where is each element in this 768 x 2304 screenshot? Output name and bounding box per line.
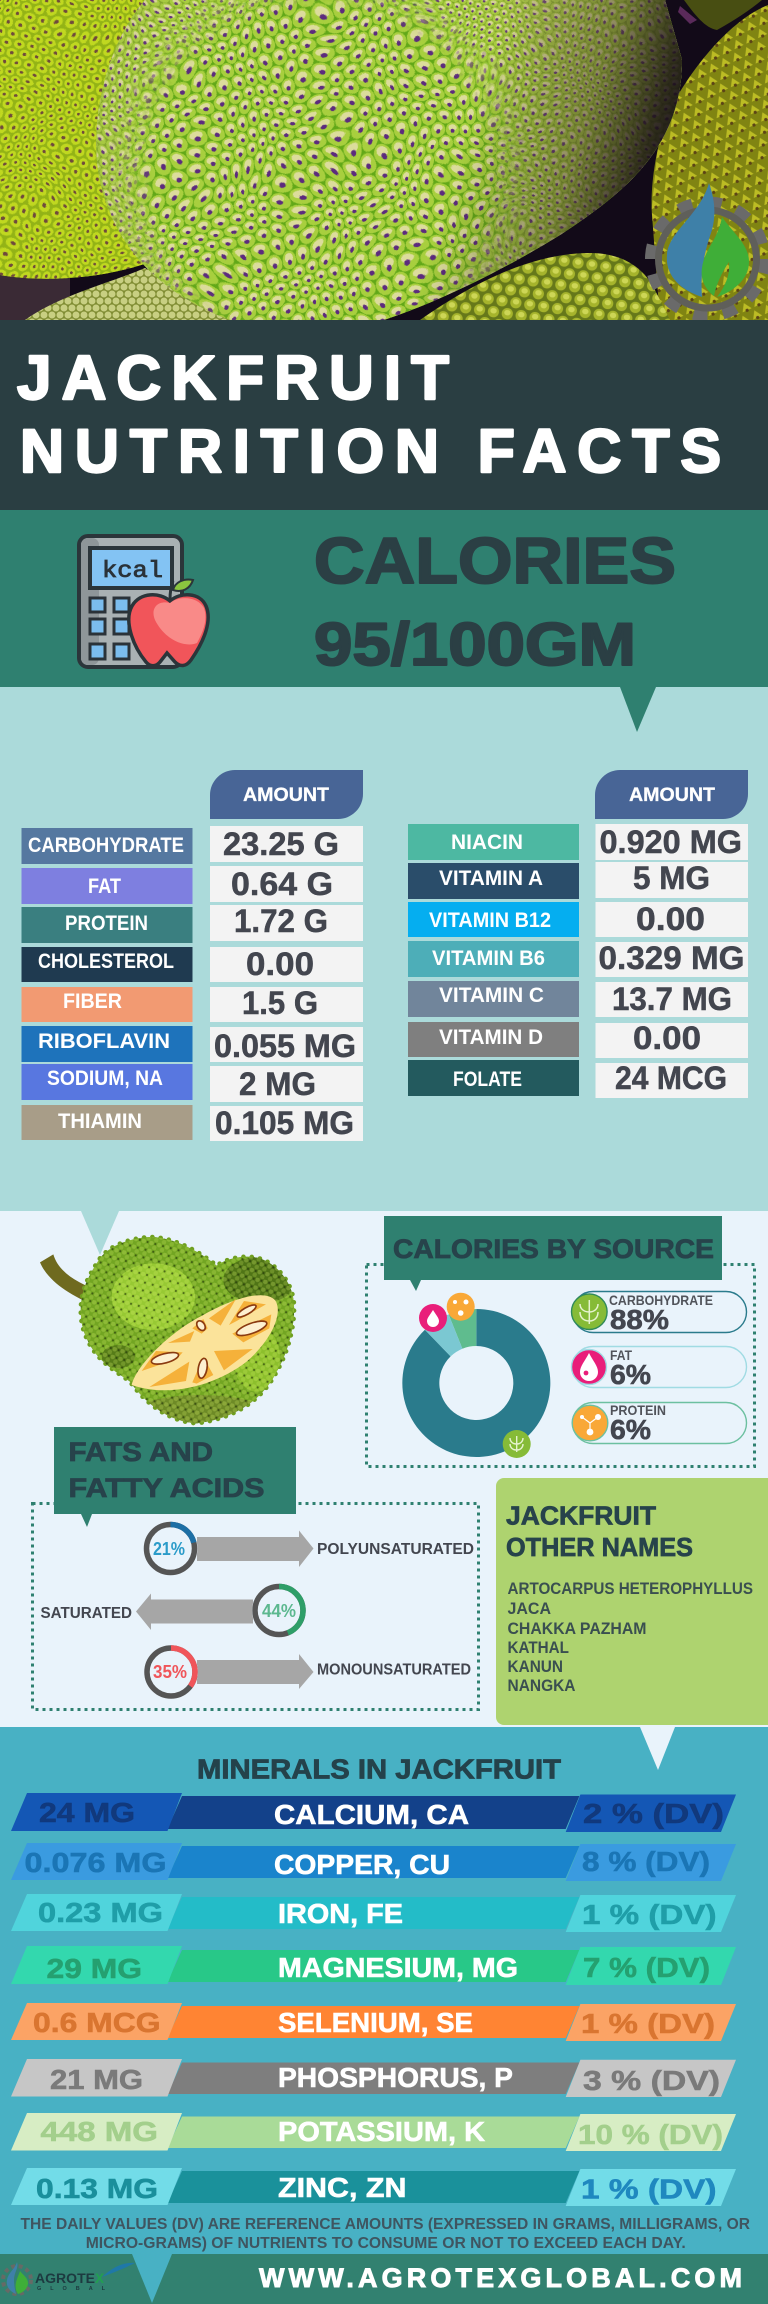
- donut chart: [402, 1293, 550, 1458]
- heading: other names: JACKFRUIT: [506, 1500, 656, 1530]
- left nutrient labels: [22, 828, 192, 1140]
- row: selenium: 0.6 MCG: [33, 2007, 160, 2038]
- row: zinc: 1 % (DV): [581, 2174, 716, 2204]
- icon: agrotex logo watermark: [652, 183, 764, 315]
- legend: carbohydrate: CARBOHYDRATE: [609, 1292, 713, 1308]
- legend: fat: 6%: [610, 1359, 651, 1390]
- left nutrient values: [210, 826, 363, 1141]
- right nutrient values: [596, 824, 748, 1098]
- legend: carbohydrate: 88%: [610, 1304, 669, 1335]
- note: daily values: MICRO-GRAMS) OF NUTRIENTS TO CONSUME OR NOT TO EXCEED EACH DAY.: [86, 2235, 686, 2252]
- panel: calories band: [0, 510, 768, 687]
- legend: protein: PROTEIN: [610, 1402, 666, 1418]
- row: selenium: [11, 2003, 736, 2041]
- row: zinc: [11, 2168, 736, 2206]
- row: phosphorus: [11, 2059, 736, 2097]
- logo: agrotex global: AGROTE: [35, 2271, 95, 2286]
- row: iron: 0.23 MG: [38, 1897, 163, 1928]
- arrow: polyunsaturated 21%: 21%: [153, 1539, 185, 1559]
- right nutrient values: 0.329 MG: [598, 940, 744, 976]
- right nutrient values: 0.00: [633, 1020, 701, 1056]
- panel: pale breakdown section: [0, 1211, 768, 1727]
- arrow: monounsaturated 35%: [144, 1645, 471, 1699]
- left nutrient values: 2 MG: [239, 1066, 316, 1102]
- left nutrient values: 0.00: [246, 946, 314, 982]
- legend: protein: 6%: [610, 1414, 651, 1445]
- arrow: other names pointer: [640, 1727, 675, 1770]
- list: other names: ARTOCARPUS HETEROPHYLLUS: [508, 1580, 753, 1598]
- left nutrient values: 0.64 G: [231, 866, 333, 902]
- panel: fats and fatty acids: [32, 1427, 478, 1710]
- row: iron: 1 % (DV): [582, 1899, 716, 1930]
- left nutrient labels: FAT: [88, 875, 121, 898]
- photo: jackfruits close-up: [0, 0, 768, 320]
- row: zinc: 0.13 MG: [36, 2173, 158, 2204]
- note: daily values: THE DAILY VALUES (DV) ARE REFERENCE AMOUNTS (EXPRESSED IN GRAMS, MILLIGRAMS, OR: [20, 2216, 750, 2233]
- icon: calculator with apple: [79, 536, 208, 667]
- arrow: monounsaturated 35%: 35%: [153, 1662, 187, 1682]
- panel: title band: [0, 320, 768, 510]
- legend: protein: [572, 1402, 746, 1445]
- panel: footer: [0, 2254, 768, 2304]
- heading: calories by source: CALORIES BY SOURCE: [393, 1234, 714, 1264]
- panel: calories by source: [366, 1216, 754, 1466]
- list: other names: KANUN: [508, 1658, 563, 1676]
- row: potassium: 448 MG: [40, 2116, 158, 2147]
- row: iron: IRON, FE: [278, 1898, 403, 1929]
- left nutrient labels: FIBER: [63, 990, 122, 1013]
- logo: agrotex global: X: [95, 2271, 104, 2286]
- right nutrient labels: VITAMIN B12: [429, 909, 551, 932]
- list: other names: [508, 1580, 753, 1695]
- left nutrient values: 0.055 MG: [214, 1028, 356, 1064]
- arrow: calories pointer: [620, 687, 656, 732]
- panel: other names: [496, 1478, 768, 1725]
- right nutrient labels: VITAMIN B6: [432, 947, 545, 970]
- right nutrient values: 13.7 MG: [612, 981, 732, 1017]
- left nutrient labels: PROTEIN: [65, 912, 148, 935]
- right nutrient values: 5 MG: [633, 860, 710, 896]
- row: iron: [11, 1894, 736, 1932]
- row: copper: [11, 1843, 736, 1881]
- row: copper: 8 % (DV): [582, 1846, 710, 1877]
- heading: calories by source: [384, 1216, 722, 1291]
- logo: agrotex global: GLOBAL: [37, 2286, 106, 2292]
- row: copper: COPPER, CU: [274, 1849, 450, 1880]
- right nutrient labels: VITAMIN A: [439, 867, 543, 890]
- arrow: saturated 44%: SATURATED: [40, 1605, 132, 1622]
- legend: fat: FAT: [610, 1347, 632, 1363]
- arrow: polyunsaturated 21%: POLYUNSATURATED: [317, 1541, 474, 1558]
- row: phosphorus: PHOSPHORUS, P: [278, 2062, 513, 2093]
- right nutrient values: 24 MCG: [615, 1060, 727, 1096]
- calories heading: [314, 524, 676, 678]
- row: copper: 0.076 MG: [24, 1847, 166, 1878]
- row: phosphorus: 21 MG: [50, 2064, 143, 2095]
- list: other names: CHAKKA PAZHAM: [508, 1620, 646, 1638]
- arrow: monounsaturated 35%: MONOUNSATURATED: [317, 1662, 471, 1678]
- arrow: saturated 44%: [40, 1584, 306, 1638]
- list: other names: KATHAL: [508, 1639, 569, 1657]
- title: JACKFRUIT: [17, 344, 449, 413]
- left nutrient values: 1.5 G: [242, 985, 318, 1021]
- row: potassium: 10 % (DV): [578, 2119, 723, 2150]
- note: daily values: [20, 2216, 750, 2252]
- heading: fats and fatty acids: FATS AND: [68, 1437, 213, 1467]
- row: phosphorus: 3 % (DV): [583, 2065, 720, 2096]
- row: magnesium: 7 % (DV): [583, 1952, 710, 1983]
- row: calcium: [11, 1793, 736, 1832]
- arrow: saturated 44%: 44%: [262, 1601, 296, 1621]
- row: magnesium: [11, 1946, 736, 1985]
- right nutrient labels: VITAMIN C: [439, 984, 544, 1007]
- heading: minerals: MINERALS IN JACKFRUIT: [197, 1754, 561, 1784]
- row: zinc: ZINC, ZN: [278, 2172, 406, 2203]
- row: selenium: 1 % (DV): [581, 2008, 715, 2039]
- left nutrient values: 0.105 MG: [215, 1105, 354, 1141]
- left nutrient labels: RIBOFLAVIN: [38, 1030, 170, 1053]
- amount header left: AMOUNT: [243, 785, 329, 806]
- right nutrient values: 0.00: [636, 901, 705, 937]
- icon: calculator with apple: kcal: [102, 558, 163, 584]
- right nutrient labels: NIACIN: [451, 831, 523, 854]
- logo: agrotex global: [3, 2262, 135, 2294]
- left nutrient labels: CHOLESTEROL: [38, 950, 174, 973]
- list: other names: JACA: [508, 1600, 551, 1618]
- legend: fat: [572, 1346, 746, 1390]
- left nutrient labels: THIAMIN: [58, 1110, 142, 1133]
- right nutrient values: 0.920 MG: [600, 824, 742, 860]
- arrow: polyunsaturated 21%: [144, 1522, 474, 1576]
- right nutrient labels: FOLATE: [453, 1068, 522, 1091]
- calories heading: CALORIES: [314, 524, 676, 597]
- title: NUTRITION FACTS: [20, 417, 721, 485]
- row: calcium: 24 MG: [39, 1797, 135, 1828]
- legend: carbohydrate: [572, 1292, 746, 1335]
- right nutrient labels: [408, 824, 579, 1096]
- row: calcium: CALCIUM, CA: [274, 1799, 469, 1830]
- arrow: table pointer: [81, 1211, 119, 1255]
- illustration: jackfruit: [40, 1234, 296, 1426]
- right nutrient labels: VITAMIN D: [439, 1026, 543, 1049]
- row: magnesium: MAGNESIUM, MG: [278, 1952, 518, 1983]
- left nutrient values: 1.72 G: [234, 903, 328, 939]
- list: other names: NANGKA: [508, 1677, 576, 1695]
- row: calcium: 2 % (DV): [583, 1798, 724, 1829]
- title: [17, 344, 721, 485]
- calories heading: 95/100GM: [314, 611, 636, 678]
- left nutrient values: 23.25 G: [223, 826, 339, 862]
- heading: other names: OTHER NAMES: [506, 1532, 693, 1562]
- arrow: footer pointer: [132, 2254, 172, 2303]
- heading: fats and fatty acids: FATTY ACIDS: [68, 1473, 264, 1503]
- row: selenium: SELENIUM, SE: [278, 2007, 473, 2038]
- panel: nutrient table: [0, 687, 768, 1211]
- left nutrient labels: CARBOHYDRATE: [28, 834, 184, 857]
- panel: minerals: [0, 1727, 768, 2255]
- amount header left: [210, 770, 363, 819]
- row: magnesium: 29 MG: [46, 1953, 142, 1984]
- heading: other names: [506, 1500, 693, 1562]
- heading: fats and fatty acids: [54, 1427, 296, 1527]
- amount header right: [595, 770, 748, 819]
- left nutrient labels: SODIUM, NA: [47, 1067, 163, 1090]
- amount header right: AMOUNT: [629, 785, 715, 806]
- website url: WWW.AGROTEXGLOBAL.COM: [259, 2263, 742, 2293]
- row: potassium: POTASSIUM, K: [278, 2116, 485, 2147]
- row: potassium: [11, 2113, 736, 2151]
